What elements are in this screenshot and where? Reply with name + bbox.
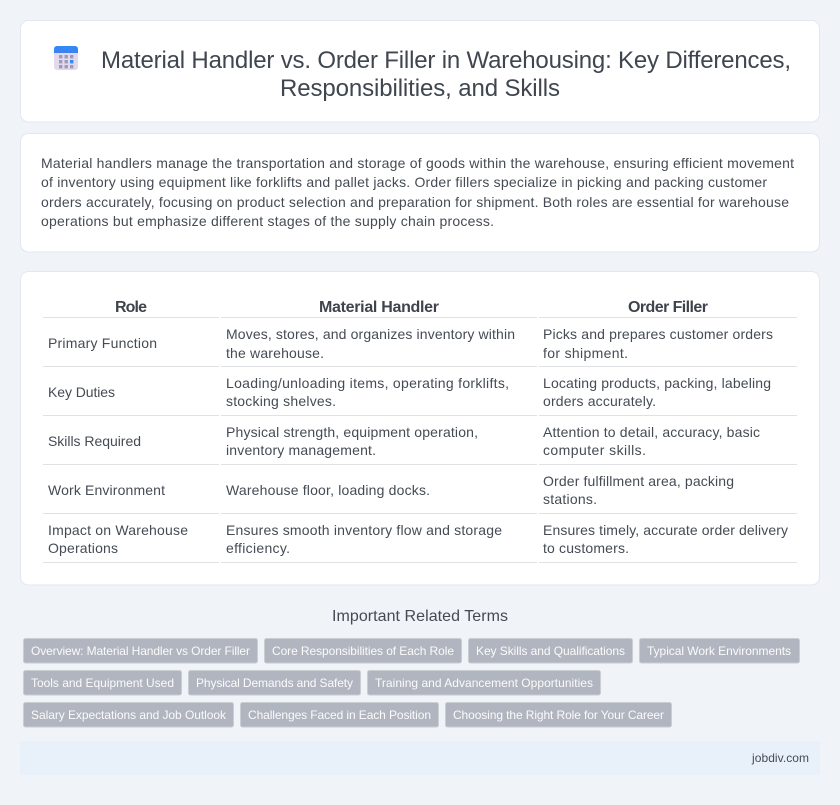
text block: intro paragraph: of inventory using equipment like forklifts and pallet jacks. Order fillers specialize in picking and packing customer — [41, 174, 767, 190]
title: Responsibilities, and Skills — [280, 75, 560, 102]
row: key duties: orders accurately. — [543, 393, 656, 409]
tag: Training and Advancement Opportunities — [375, 676, 593, 690]
row: work environment: stations. — [543, 491, 597, 507]
tag — [468, 638, 632, 663]
tag: Key Skills and Qualifications — [476, 644, 625, 658]
row: impact on warehouse operations: Impact on Warehouse — [48, 522, 188, 538]
row: primary function: Primary Function — [48, 335, 157, 351]
tag: Challenges Faced in Each Position — [248, 708, 431, 722]
table header: Order Filler — [628, 299, 708, 316]
tag — [446, 702, 672, 727]
text block: intro paragraph: orders accurately, focusing on product selection and preparation for shipment. Both roles are essential for warehouse — [41, 194, 789, 210]
panel: comparison table — [20, 272, 820, 585]
row: primary function: the warehouse. — [226, 345, 324, 361]
tag: Overview: Material Handler vs Order Filler — [31, 644, 250, 658]
row: primary function: for shipment. — [543, 345, 628, 361]
row: skills required: Skills Required — [48, 433, 141, 449]
row: work environment: Order fulfillment area, packing — [543, 473, 734, 489]
row: primary function: Moves, stores, and organizes inventory within — [226, 326, 515, 342]
table header: Role — [115, 299, 147, 316]
tag: Core Responsibilities of Each Role — [272, 644, 454, 658]
text block: intro paragraph: Material handlers manage the transportation and storage of goods within the warehouse, ensuring efficient movement — [41, 155, 794, 171]
row: work environment — [43, 473, 797, 514]
row: key duties: stocking shelves. — [226, 393, 336, 409]
tag — [240, 702, 438, 727]
row: primary function — [43, 326, 797, 367]
text block: intro paragraph — [41, 155, 794, 229]
row: key duties — [43, 375, 797, 416]
row: skills required — [43, 424, 797, 465]
tag — [24, 638, 258, 663]
row: skills required: computer skills. — [543, 442, 646, 458]
row: skills required: Attention to detail, accuracy, basic — [543, 424, 760, 440]
table header: Material Handler — [319, 299, 439, 316]
row: primary function: Picks and prepares customer orders — [543, 326, 773, 342]
heading: important related terms: Important Related Terms — [332, 608, 508, 625]
row: impact on warehouse operations: efficiency. — [226, 540, 290, 556]
tag — [24, 702, 234, 727]
row: work environment: Warehouse floor, loading docks. — [226, 482, 430, 498]
table header — [43, 299, 797, 318]
panel: header — [20, 20, 820, 122]
text block: intro paragraph: operations but emphasize different stages of the supply chain process. — [41, 213, 494, 229]
tag — [640, 638, 800, 663]
tag: Physical Demands and Safety — [196, 676, 353, 690]
footer — [20, 741, 820, 775]
row: impact on warehouse operations — [43, 522, 797, 563]
tag: Tools and Equipment Used — [31, 676, 174, 690]
title: Material Handler vs. Order Filler in Warehousing: Key Differences, — [101, 47, 791, 74]
tag — [264, 638, 462, 663]
tag — [188, 670, 360, 695]
row: skills required: inventory management. — [226, 442, 376, 458]
row: impact on warehouse operations: Operations — [48, 540, 118, 556]
tag: Salary Expectations and Job Outlook — [31, 708, 227, 722]
tag: Typical Work Environments — [647, 644, 791, 658]
row: key duties: Loading/unloading items, operating forklifts, — [226, 375, 509, 391]
row: skills required: Physical strength, equipment operation, — [226, 424, 478, 440]
footer: jobdiv.com — [751, 751, 809, 765]
tag — [368, 670, 600, 695]
panel: introduction — [20, 134, 820, 252]
tag — [24, 670, 182, 695]
row: impact on warehouse operations: Ensures smooth inventory flow and storage — [226, 522, 502, 538]
row: impact on warehouse operations: Ensures timely, accurate order delivery — [543, 522, 788, 538]
row: key duties: Locating products, packing, labeling — [543, 375, 771, 391]
tags: related terms — [24, 638, 800, 727]
icon: calendar — [54, 46, 78, 70]
row: impact on warehouse operations: to customers. — [543, 540, 629, 556]
tag: Choosing the Right Role for Your Career — [453, 708, 664, 722]
title — [101, 47, 791, 102]
row: key duties: Key Duties — [48, 384, 115, 400]
row: work environment: Work Environment — [48, 482, 165, 498]
